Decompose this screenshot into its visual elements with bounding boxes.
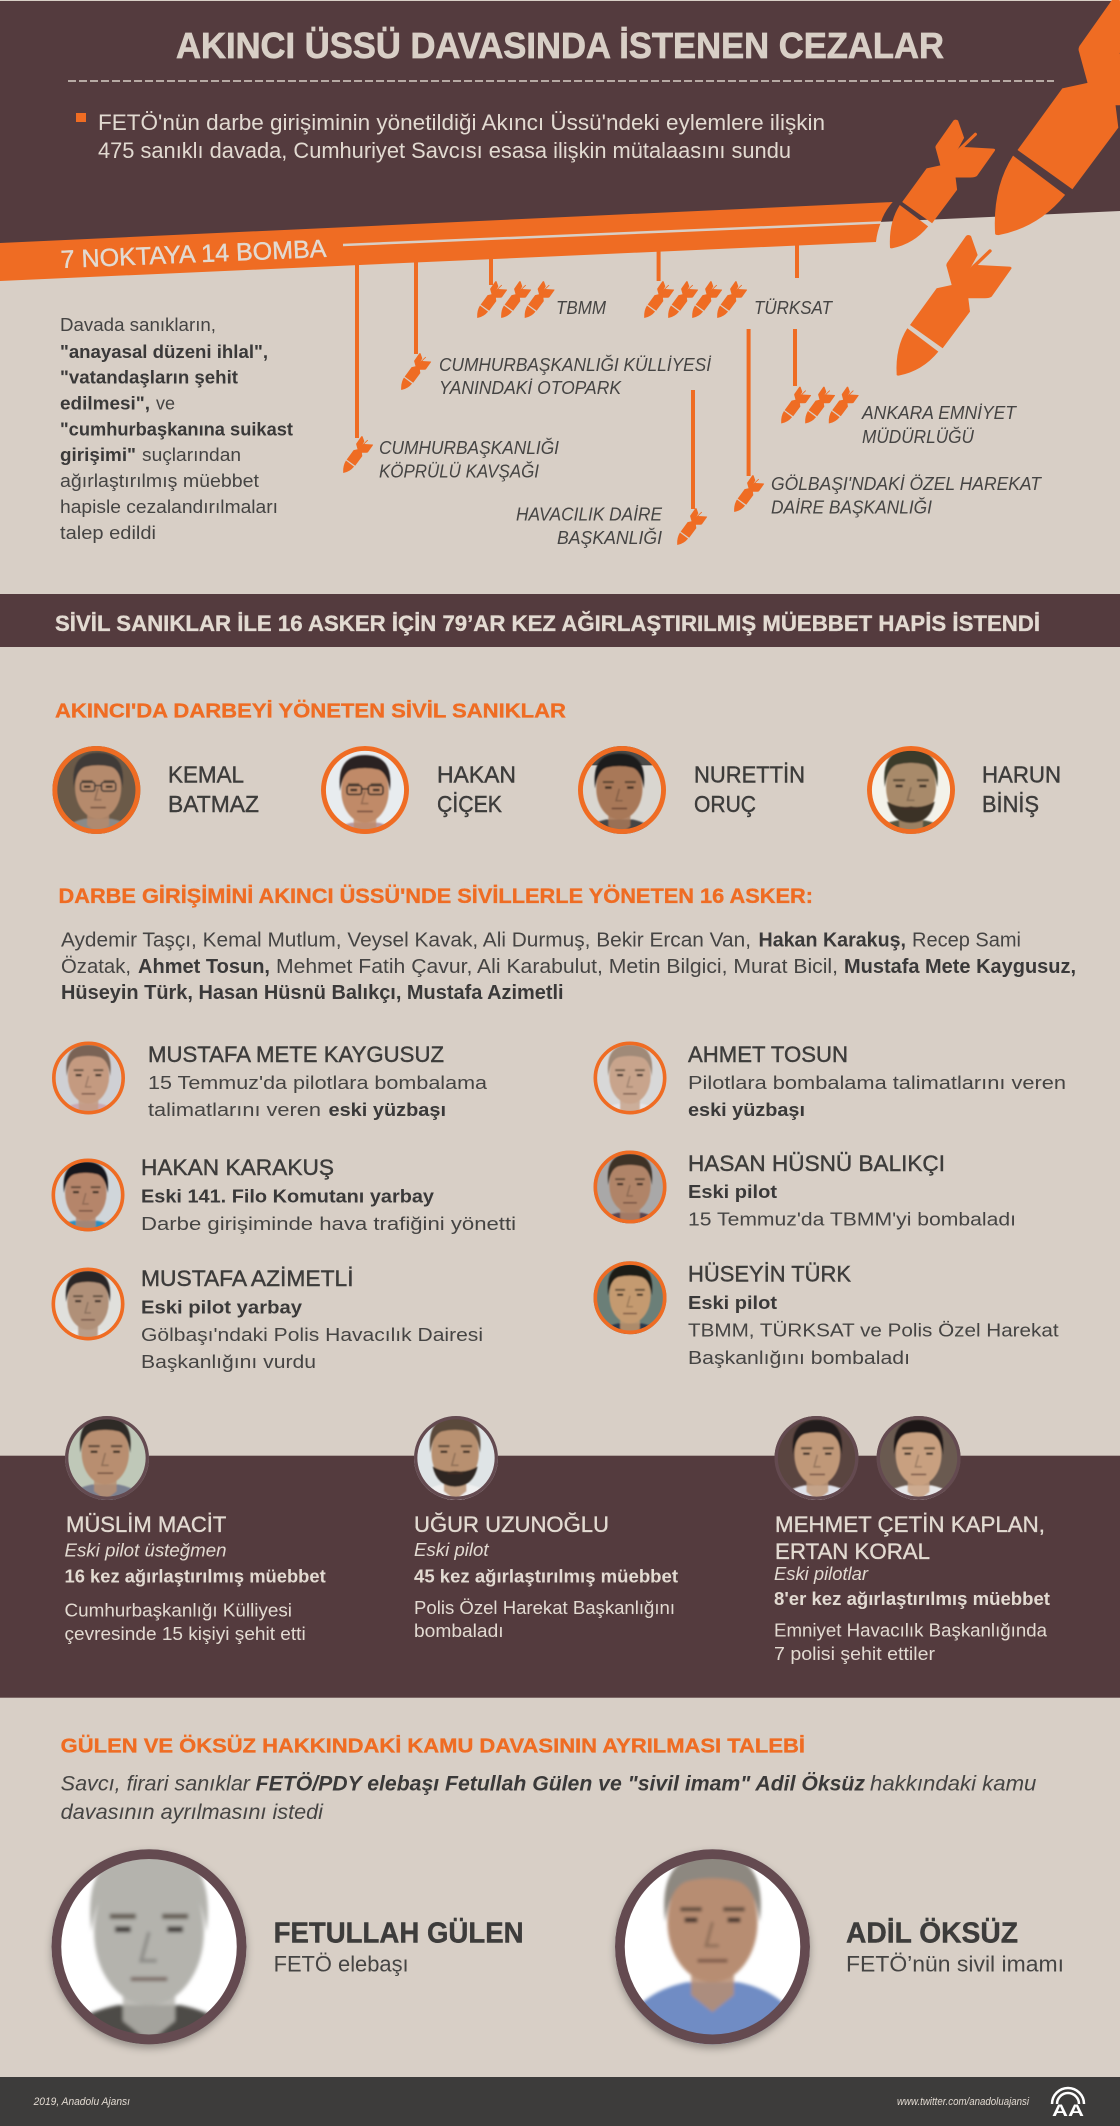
pilot: Müslim Macit: çevresinde 15 kişiyi şehit etti [64,1623,306,1644]
intro text [98,110,825,163]
icon: medium bomb on background [896,235,1012,376]
orange banner [0,202,893,281]
card: Mustafa Mete Kaygusuz: talimatlarını veren [148,1099,321,1120]
card: Hasan Hüsnü Balıkçı [594,1150,1014,1230]
soldiers name list: Mehmet Fatih Çavur, Ali Karabulut, Metin Bilgici, Murat Bicil, [276,956,838,978]
bullet marker [76,113,86,122]
icon: large bomb [995,0,1120,235]
icon: medium bomb on header [890,120,995,248]
target: TÜRKSAT: TÜRKSAT [754,298,834,318]
banner label: 7 NOKTAYA 14 BOMBA [60,235,327,274]
card: Mustafa Mete Kaygusuz: eski yüzbaşı [328,1099,446,1120]
target: Emniyet Müdürlüğü: ANKARA EMNİYET [861,403,1018,423]
target: Köprülü kavşak: CUMHURBAŞKANLIĞI [379,438,559,458]
card: Mustafa Azimetli [41,1266,483,1372]
card: Mustafa Mete Kaygusuz [52,1042,487,1120]
pilot: Uğur Uzunoğlu: Eski pilot [414,1540,490,1560]
left paragraph: suçlarından [142,445,241,465]
heading: 16 soldiers: DARBE GİRİŞİMİNİ AKINCI ÜSSÜ'NDE SİVİLLERLE YÖNETEN 16 ASKER: [58,885,813,908]
left paragraph: "vatandaşların şehit [60,368,238,388]
target: Emniyet Müdürlüğü [781,387,1018,447]
card: Mustafa Mete Kaygusuz: 15 Temmuz'da pilotlara bombalama [148,1072,488,1093]
pilots: Mehmet Çetin Kaplan, Ertan Koral: ERTAN KORAL [775,1539,930,1564]
card: Mustafa Mete Kaygusuz: MUSTAFA METE KAYGUSUZ [148,1042,444,1067]
section band [0,594,1120,647]
target: Köprülü kavşak: KÖPRÜLÜ KAVŞAĞI [379,462,539,482]
person: Adil Öksüz [610,1849,1064,2064]
person: Kemal Batmaz [52,746,258,834]
section band: SİVİL SANIKLAR İLE 16 ASKER İÇİN 79’AR KEZ AĞIRLAŞTIRILMIŞ MÜEBBET HAPİS İSTENDİ [55,611,1040,636]
card: Hüseyin Türk: HÜSEYİN TÜRK [688,1262,851,1287]
card: Ahmet Tosun: Pilotlara bombalama talimatlarını veren [688,1072,1066,1093]
soldiers name list [61,930,1076,1004]
card: Hüseyin Türk: Eski pilot [688,1292,777,1313]
person: Fetullah Gülen: FETÖ elebaşı [274,1952,409,1977]
card: Hakan Karakuş: HAKAN KARAKUŞ [141,1155,334,1180]
left paragraph: "anayasal düzeni ihlal", [60,342,268,362]
soldiers name list: Recep Sami [912,930,1021,952]
person: Harun Biniş: BİNİŞ [982,791,1039,817]
left paragraph: hapisle cezalandırılmaları [60,497,278,517]
target: TBMM: TBMM [556,298,606,318]
pilots: Mehmet Çetin Kaplan, Ertan Koral: Eski pilotlar [774,1564,869,1584]
pilot: Uğur Uzunoğlu: bombaladı [414,1620,504,1641]
left paragraph: girişimi" [60,445,136,465]
card: Ahmet Tosun [594,1042,1065,1120]
pilot: Müslim Macit: Cumhurbaşkanlığı Külliyesi [64,1600,292,1621]
target: Gölbaşı Özel Harekat: DAİRE BAŞKANLIĞI [771,498,932,518]
person: Adil Öksüz: FETÖ’nün sivil imamı [846,1952,1064,1977]
pilot: Müslim Macit: 16 kez ağırlaştırılmış müebbet [64,1566,326,1587]
target: TBMM [477,281,606,318]
pilot: Uğur Uzunoğlu: Polis Özel Harekat Başkanlığını [414,1597,675,1618]
target: Külliye otopark: YANINDAKİ OTOPARK [439,378,622,398]
pilots: Mehmet Çetin Kaplan, Ertan Koral: 8'er kez ağırlaştırılmış müebbet [774,1588,1050,1609]
prosecutor statement [61,1773,1037,1824]
target: Külliye otopark [401,353,712,398]
target: TÜRKSAT [644,281,834,318]
target: Havacılık Daire: HAVACILIK DAİRE [516,504,663,524]
pilots: Mehmet Çetin Kaplan, Ertan Koral: Emniyet Havacılık Başkanlığında [774,1620,1048,1641]
soldiers name list: Özatak, [61,956,131,978]
title: AKINCI ÜSSÜ DAVASINDA İSTENEN CEZALAR [176,25,944,66]
target: Gölbaşı Özel Harekat [734,474,1043,518]
target: Külliye otopark: CUMHURBAŞKANLIĞI KÜLLİYESİ [439,355,712,375]
left paragraph: ve [156,394,175,414]
left paragraph: "cumhurbaşkanına suikast [60,420,293,440]
target: Köprülü kavşak [343,436,559,482]
target: Emniyet Müdürlüğü: MÜDÜRLÜĞÜ [862,427,975,447]
left paragraph: edilmesi", [60,394,150,414]
soldiers name list: Hüseyin Türk, Hasan Hüsnü Balıkçı, Mustafa Azimetli [61,982,564,1004]
intro text: FETÖ'nün darbe girişiminin yönetildiği Akıncı Üssü'ndeki eylemlere ilişkin [98,110,825,135]
person: Hakan Çiçek: ÇİÇEK [437,791,503,817]
card: Hasan Hüsnü Balıkçı: Eski pilot [688,1181,777,1202]
person: Kemal Batmaz: BATMAZ [168,791,259,817]
prosecutor statement: Savcı, firari sanıklar [61,1773,251,1796]
pilot: Uğur Uzunoğlu [401,1416,678,1641]
card: Mustafa Azimetli: Gölbaşı'ndaki Polis Havacılık Dairesi [141,1324,483,1345]
footer [0,2077,1120,2126]
target: Gölbaşı Özel Harekat: GÖLBAŞI'NDAKİ ÖZEL HAREKAT [771,474,1043,494]
prosecutor statement: davasının ayrılmasını istedi [61,1801,324,1824]
soldiers name list: Hakan Karakuş, [758,930,906,952]
pilot: Müslim Macit: Eski pilot üsteğmen [64,1541,226,1561]
soldiers name list: Mustafa Mete Kaygusuz, [844,956,1076,978]
card: Hüseyin Türk: Başkanlığını bombaladı [688,1347,910,1368]
heading: Gülen and Öksüz: GÜLEN VE ÖKSÜZ HAKKINDAKİ KAMU DAVASININ AYRILMASI TALEBİ [61,1734,805,1757]
person: Fetullah Gülen: FETULLAH GÜLEN [274,1917,524,1950]
card: Hasan Hüsnü Balıkçı: HASAN HÜSNÜ BALIKÇI [688,1151,945,1176]
card: Hüseyin Türk: TBMM, TÜRKSAT ve Polis Özel Harekat [688,1320,1059,1341]
person: Hakan Çiçek: HAKAN [437,762,516,788]
pilot: Müslim Macit [51,1416,326,1644]
target: Havacılık Daire: BAŞKANLIĞI [557,528,662,548]
pilot: Uğur Uzunoğlu: UĞUR UZUNOĞLU [414,1512,609,1537]
person: Nurettin Oruç: ORUÇ [694,791,756,817]
prosecutor statement: FETÖ/PDY elebaşı Fetullah Gülen ve "sivil imam" Adil Öksüz [256,1773,866,1796]
pilots: Mehmet Çetin Kaplan, Ertan Koral: 7 polisi şehit ettiler [774,1643,935,1664]
person: Kemal Batmaz: KEMAL [168,762,244,788]
left paragraph: ağırlaştırılmış müebbet [60,471,259,491]
person: Harun Biniş: HARUN [982,762,1061,788]
card: Mustafa Azimetli: MUSTAFA AZİMETLİ [141,1266,354,1291]
left paragraph: Davada sanıkların, [60,315,216,335]
left paragraph [60,315,293,543]
person: Nurettin Oruç [578,746,804,834]
panel: pilots [0,1456,1120,1698]
card: Hakan Karakuş [52,1158,515,1234]
card: Mustafa Azimetli: Başkanlığını vurdu [141,1351,316,1372]
twitter link text: www.twitter.com/anadoluajansi [897,2096,1029,2108]
card: Hakan Karakuş: Darbe girişiminde hava trafiğini yönetti [141,1213,516,1234]
intro text: 475 sanıklı davada, Cumhuriyet Savcısı esasa ilişkin mütalaasını sundu [98,138,791,163]
prosecutor statement: hakkındaki kamu [870,1773,1037,1796]
target: Havacılık Daire [516,504,707,548]
card: Hakan Karakuş: Eski 141. Filo Komutanı yarbay [141,1186,435,1207]
card: Hüseyin Türk [583,1261,1059,1368]
icon: AA logo: AA [1052,2101,1084,2120]
pilot: Uğur Uzunoğlu: 45 kez ağırlaştırılmış müebbet [414,1566,678,1587]
heading: civil defendants: AKINCI'DA DARBEYİ YÖNETEN SİVİL SANIKLAR [55,699,567,722]
person: Hakan Çiçek [321,746,514,834]
soldiers name list: Ahmet Tosun, [138,956,270,978]
pilots: Mehmet Çetin Kaplan, Ertan Koral: MEHMET ÇETİN KAPLAN, [775,1512,1045,1537]
card: Ahmet Tosun: eski yüzbaşı [688,1099,805,1120]
left paragraph: talep edildi [60,523,156,543]
copyright: 2019, Anadolu Ajansı [33,2096,130,2108]
pilot: Müslim Macit: MÜSLİM MACİT [66,1512,226,1537]
icon: AA logo [1052,2088,1084,2120]
header panel [0,1,1120,262]
pilots: Mehmet Çetin Kaplan, Ertan Koral [765,1416,1050,1664]
person: Adil Öksüz: ADİL ÖKSÜZ [846,1917,1018,1950]
card: Mustafa Azimetli: Eski pilot yarbay [141,1297,303,1318]
bomb drop lines [357,242,797,509]
person: Fetullah Gülen [47,1848,522,2052]
person: Harun Biniş [867,746,1060,834]
card: Hasan Hüsnü Balıkçı: 15 Temmuz'da TBMM'yi bombaladı [688,1209,1016,1230]
person: Nurettin Oruç: NURETTİN [694,762,805,788]
card: Ahmet Tosun: AHMET TOSUN [688,1042,848,1067]
soldiers name list: Aydemir Taşçı, Kemal Mutlum, Veysel Kavak, Ali Durmuş, Bekir Ercan Van, [61,930,751,952]
